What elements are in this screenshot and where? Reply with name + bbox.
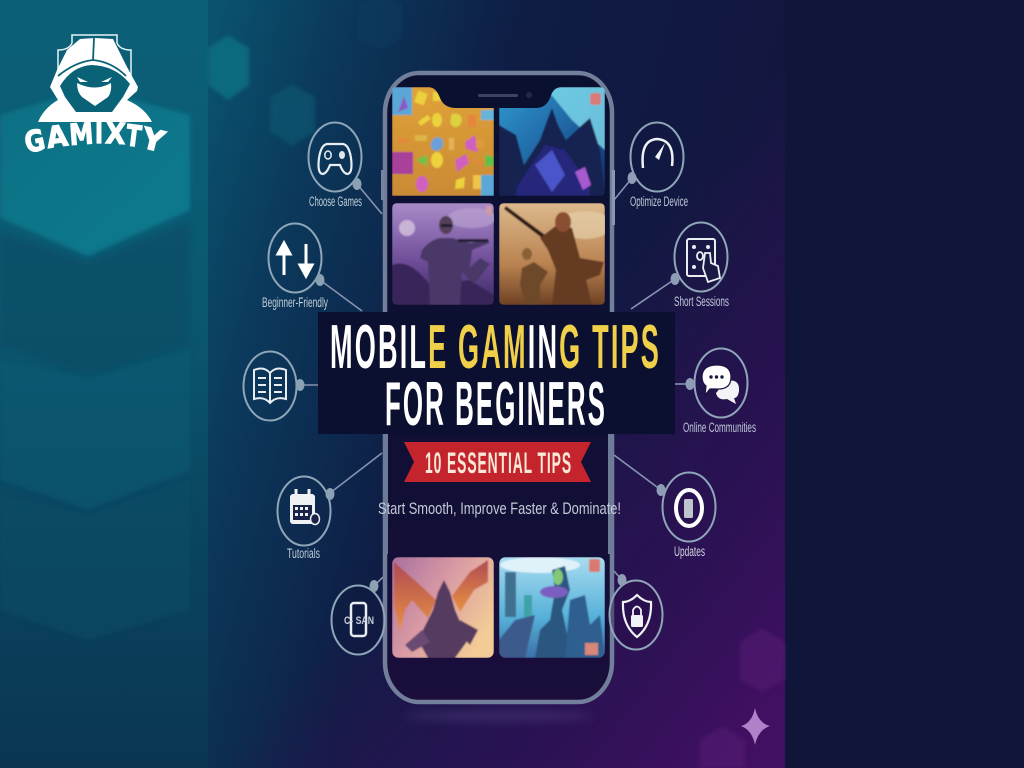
icon: chat bubbles — [716, 380, 739, 404]
logo wordmark: G — [21, 122, 48, 160]
icon: gauge — [643, 139, 672, 168]
label: Updates — [674, 544, 705, 559]
phone body — [385, 73, 612, 702]
tip: Short Sessions — [670, 222, 729, 309]
game thumbnail: sky towers — [499, 557, 605, 658]
game thumbnail: dragon — [392, 557, 494, 658]
game thumbnail: puzzle — [392, 87, 494, 196]
logo eyes — [77, 77, 112, 82]
label: Short Sessions — [674, 294, 729, 309]
phone glow — [405, 712, 595, 720]
icon: gamepad — [318, 144, 352, 174]
icon: arrows — [278, 243, 312, 276]
title panel: FOR BEGINERS — [385, 370, 607, 439]
icon text: C- SAN — [344, 615, 374, 627]
title line 1: MOBILE GAMING TIPS — [330, 313, 661, 382]
red banner — [404, 442, 591, 482]
phone speaker — [478, 94, 518, 97]
phone sides below title — [383, 434, 613, 554]
label: Choose Games — [309, 194, 362, 209]
logo wordmark: I — [95, 116, 103, 150]
logo hood — [38, 38, 152, 122]
subtitle: Start Smooth, Improve Faster & Dominate! — [378, 499, 621, 518]
phone — [381, 73, 615, 720]
tip: book — [244, 352, 304, 420]
logo wordmark: X — [105, 116, 126, 151]
icon: touch game screen — [687, 239, 715, 276]
tip: Beginner-Friendly — [262, 224, 328, 310]
connector lines — [300, 178, 690, 586]
tip: security lock — [610, 574, 662, 650]
logo wordmark: A — [44, 118, 70, 155]
tip: Choose Games — [308, 122, 362, 209]
icon: open book — [254, 369, 286, 403]
infographic canvas — [0, 0, 786, 768]
logo wordmark: M — [68, 116, 94, 152]
background hexagons — [0, 0, 785, 768]
game thumbnail: soldier — [392, 203, 496, 305]
icon: refresh phone — [676, 490, 702, 526]
label: Online Communities — [683, 420, 756, 435]
logo shield outline — [58, 35, 131, 88]
tip: Online Communities — [683, 348, 756, 435]
tip: C-SAN phone — [332, 580, 384, 654]
icon: calendar — [290, 494, 315, 524]
logo ridge lines — [58, 38, 126, 76]
icon: shield — [623, 595, 651, 637]
title panel — [318, 312, 675, 439]
icon: sparkle star — [741, 708, 770, 745]
tip: Updates — [656, 472, 716, 559]
logo wordmark — [21, 116, 169, 160]
game thumbnail: desert duo — [499, 203, 613, 305]
logo wordmark: T — [124, 118, 143, 154]
logo face — [60, 65, 130, 112]
tip: Optimize Device — [628, 122, 688, 209]
label: Optimize Device — [630, 194, 688, 209]
logo wordmark: Y — [137, 121, 169, 159]
label: Beginner-Friendly — [262, 295, 328, 310]
game thumbnail: dark warrior — [499, 87, 605, 196]
icon: smartphone — [351, 603, 366, 636]
label: Tutorials — [287, 546, 320, 561]
logo mask — [77, 83, 111, 106]
Gamixty logo — [21, 35, 169, 160]
red banner: 10 ESSENTIAL TIPS — [425, 447, 572, 480]
tip: Tutorials — [278, 476, 334, 561]
